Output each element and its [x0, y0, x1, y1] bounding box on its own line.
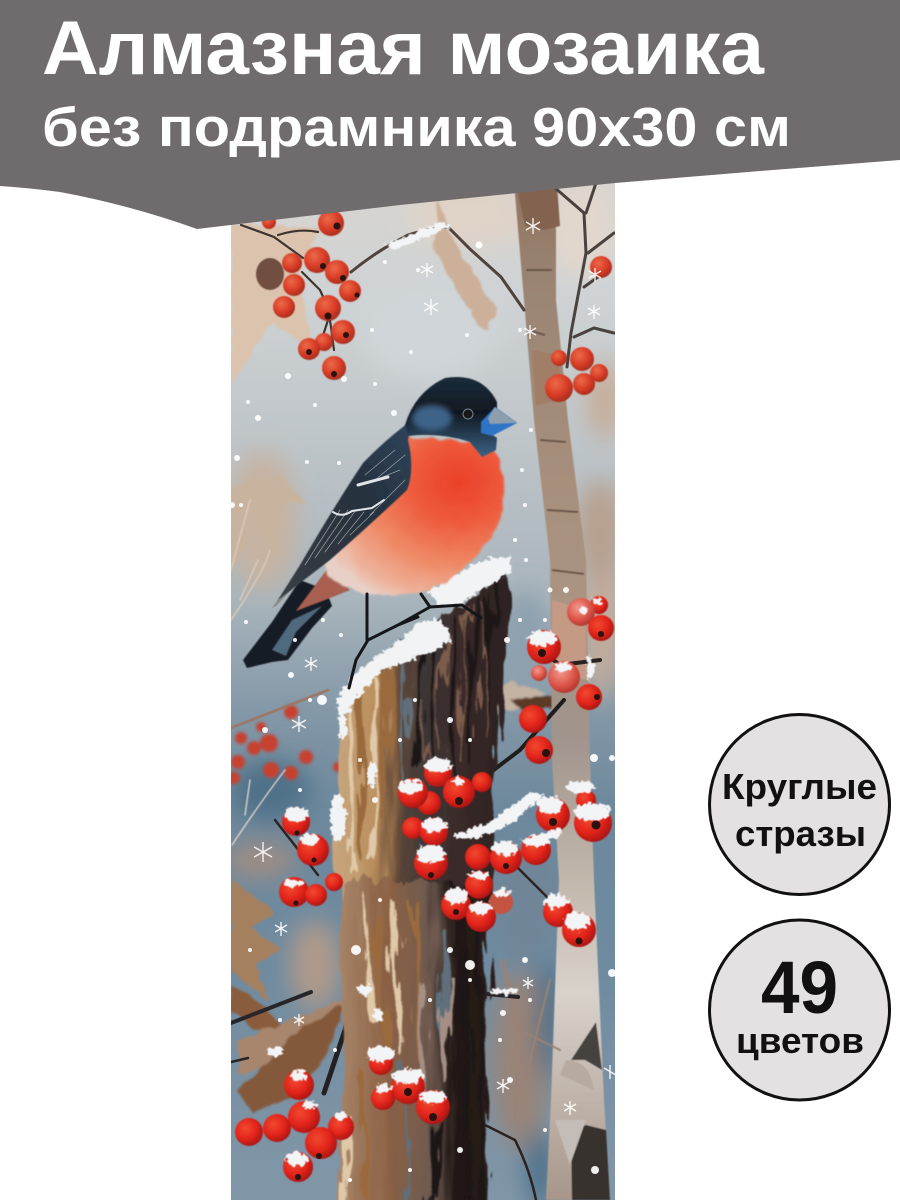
badge: round rhinestones: [710, 714, 890, 894]
badge: round rhinestones: Круглые: [722, 766, 877, 807]
bird head: [405, 377, 497, 457]
badge: 49 colours: [710, 920, 890, 1100]
berries: upper right cluster: [545, 256, 612, 402]
birch trunk: [513, 170, 610, 1200]
badge: round rhinestones: стразы: [735, 813, 866, 854]
bird tail: [243, 580, 332, 668]
bird beak: [481, 407, 517, 436]
berries: top cluster: [262, 210, 361, 380]
bird: [243, 377, 517, 688]
berries: middle right cluster: [519, 596, 614, 764]
branches: [231, 183, 614, 1200]
bird body: [322, 437, 504, 595]
title: Алмазная мозаика: [42, 6, 765, 91]
badge: 49 colours: цветов: [736, 1020, 864, 1061]
background leaves: [231, 201, 552, 1114]
blurred background tones: [225, 185, 623, 1200]
bird wing: [278, 420, 412, 600]
blue cheek: [412, 405, 452, 431]
painting background: [231, 170, 615, 1200]
bird eye: [463, 409, 473, 419]
background branches: [231, 500, 560, 1120]
legs and claws: [349, 594, 481, 688]
falling snow: [229, 213, 616, 1182]
bird rump: [296, 568, 350, 611]
berries: left cluster: [279, 808, 343, 907]
berries: central cluster: [398, 759, 612, 947]
berry calyxes: [294, 222, 604, 1180]
wing feather details: [305, 450, 405, 565]
faded background berries: [228, 705, 343, 784]
painting: bullfinch on a snowy stump: [225, 170, 623, 1200]
berries: bottom clusters: [235, 1051, 450, 1182]
header banner: [0, 0, 900, 229]
dark dried leaf: [256, 258, 284, 290]
badge: 49 colours: 49: [761, 946, 838, 1029]
snow caps on berries and branches: [266, 222, 611, 1166]
snowflakes: [254, 218, 616, 1115]
subtitle: без подрамника 90х30 см: [42, 96, 791, 158]
stump: [334, 570, 509, 1200]
snow on stump: [330, 556, 511, 842]
